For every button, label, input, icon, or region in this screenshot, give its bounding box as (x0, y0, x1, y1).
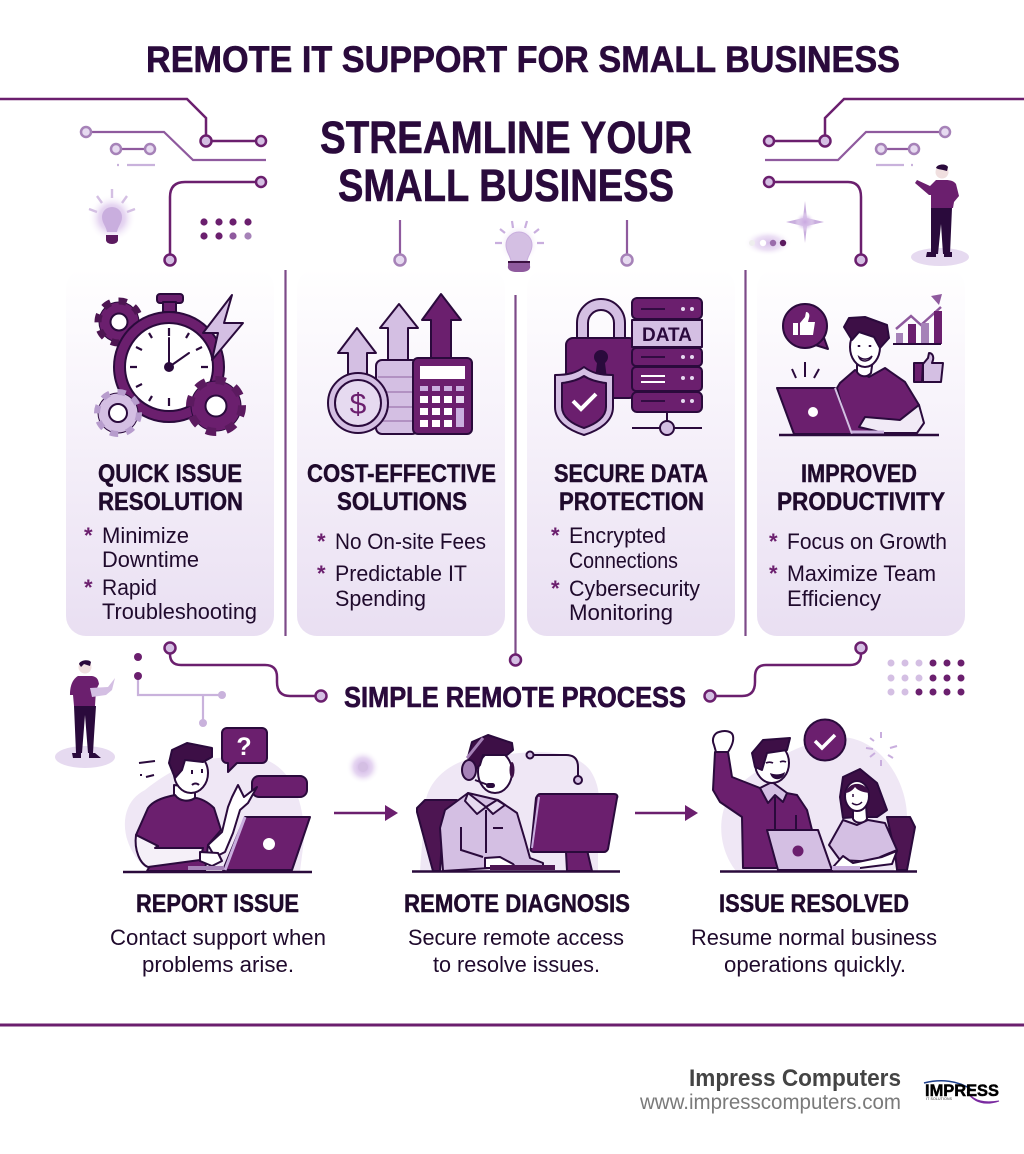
step text: issue resolved (691, 890, 937, 977)
circuit connector: left to process heading (164, 642, 326, 702)
panel bullets: * (317, 561, 326, 586)
logo: impress: IMPRESS (925, 1081, 999, 1100)
step text: report issue: REPORT ISSUE (136, 890, 299, 918)
panel bullets: Maximize Team (787, 561, 936, 586)
panel bullets: * (551, 576, 560, 601)
arrow: step 2 to step 3 (635, 805, 698, 821)
heading: simple remote process: SIMPLE REMOTE PROCESS (344, 682, 686, 714)
step text: issue resolved: Resume normal business (691, 925, 937, 950)
arrow: step 1 to step 2 (334, 805, 398, 821)
panel: secure data protection (527, 268, 735, 636)
step text: remote diagnosis: to resolve issues. (433, 952, 600, 977)
panel bullets: * (317, 529, 326, 554)
panel heading: QUICK ISSUE (98, 460, 242, 488)
circuit lines: top left (0, 99, 266, 266)
circuit connector: right to process heading (704, 642, 866, 702)
glow node between steps (346, 750, 380, 784)
icon: coins, arrows and calculator: $ (350, 388, 367, 421)
panel heading (554, 460, 708, 516)
panel heading (307, 460, 496, 516)
decorative nodes and connector: process left (134, 653, 226, 727)
icon: report issue illustration: ? (236, 733, 252, 761)
panel bullets: Focus on Growth (787, 529, 947, 554)
step text: report issue: problems arise. (142, 952, 294, 977)
icon: person at laptop with chart and thumbs up (777, 294, 943, 435)
panel bullets: Rapid (102, 575, 157, 600)
panel heading: SOLUTIONS (337, 488, 467, 516)
title: REMOTE IT SUPPORT FOR SMALL BUSINESS (146, 39, 900, 80)
icon: centre lightbulb (495, 221, 544, 272)
dot grid: top left (200, 218, 252, 240)
panel bullets (84, 523, 257, 624)
step text: remote diagnosis (404, 890, 630, 977)
step text: remote diagnosis: REMOTE DIAGNOSIS (404, 890, 630, 918)
step text: issue resolved: ISSUE RESOLVED (719, 890, 909, 918)
figure: standing person with tablet (55, 660, 115, 768)
icon: remote diagnosis illustration (412, 735, 620, 872)
icon: issue resolved illustration (713, 720, 917, 872)
step text: issue resolved: operations quickly. (724, 952, 906, 977)
panel bullets: Encrypted (569, 523, 666, 548)
icon: report issue illustration (123, 728, 312, 872)
figure: standing person top right (911, 164, 969, 266)
panel heading: IMPROVED (801, 460, 917, 488)
panel bullets: * (769, 529, 778, 554)
icon: coins, arrows and calculator (328, 294, 472, 434)
panel heading (777, 460, 945, 516)
panel heading: PROTECTION (559, 488, 704, 516)
panel bullets: Connections (569, 548, 678, 573)
panel bullets: Downtime (102, 547, 199, 572)
panel heading: SECURE DATA (554, 460, 708, 488)
panel heading: COST-EFFECTIVE (307, 460, 496, 488)
footer: company name and website (639, 1065, 901, 1114)
step text: report issue: Contact support when (110, 925, 326, 950)
panel heading: RESOLUTION (98, 488, 243, 516)
footer: company name and website: Impress Computers (689, 1065, 901, 1092)
logo: impress: IT SOLUTIONS (926, 1097, 953, 1101)
icon: left lightbulb (88, 189, 136, 244)
panel bullets: Efficiency (787, 586, 881, 611)
panel bullets: * (84, 575, 93, 600)
connectors under heading (394, 220, 632, 266)
panel bullets: Spending (335, 586, 426, 611)
connector node: centre divider (510, 654, 521, 666)
icon: stopwatch with gears (97, 294, 243, 434)
panel bullets: Monitoring (569, 600, 673, 625)
panel heading: PRODUCTIVITY (777, 488, 945, 516)
panel heading (98, 460, 243, 516)
sparkle and glowing dots (744, 201, 824, 256)
heading: streamline your small business: STREAMLINE YOUR (320, 112, 692, 163)
panel bullets: * (551, 523, 560, 548)
circuit lines: top right (764, 99, 1024, 266)
panel bullets: Troubleshooting (102, 599, 257, 624)
panel bullets (317, 529, 486, 611)
panel: cost-effective solutions (297, 268, 505, 636)
dot grid: right (888, 660, 964, 696)
footer: company name and website: www.impresscomputers.com (639, 1091, 901, 1114)
panel bullets: Minimize (102, 523, 189, 548)
panel bullets: * (769, 561, 778, 586)
heading: streamline your small business (320, 112, 692, 211)
panel bullets: Cybersecurity (569, 576, 700, 601)
heading: streamline your small business: SMALL BUSINESS (338, 160, 674, 211)
panel bullets: * (84, 523, 93, 548)
panel bullets (551, 523, 700, 625)
panel bullets: No On-site Fees (335, 529, 486, 554)
icon: padlock, shield and data server: DATA (642, 325, 692, 346)
panel bullets (769, 529, 947, 611)
panel bullets: Predictable IT (335, 561, 467, 586)
step text: report issue (110, 890, 326, 977)
step text: remote diagnosis: Secure remote access (408, 925, 624, 950)
panel: quick issue resolution (66, 268, 274, 636)
panel: improved productivity (757, 268, 965, 636)
icon: padlock, shield and data server (555, 298, 702, 435)
